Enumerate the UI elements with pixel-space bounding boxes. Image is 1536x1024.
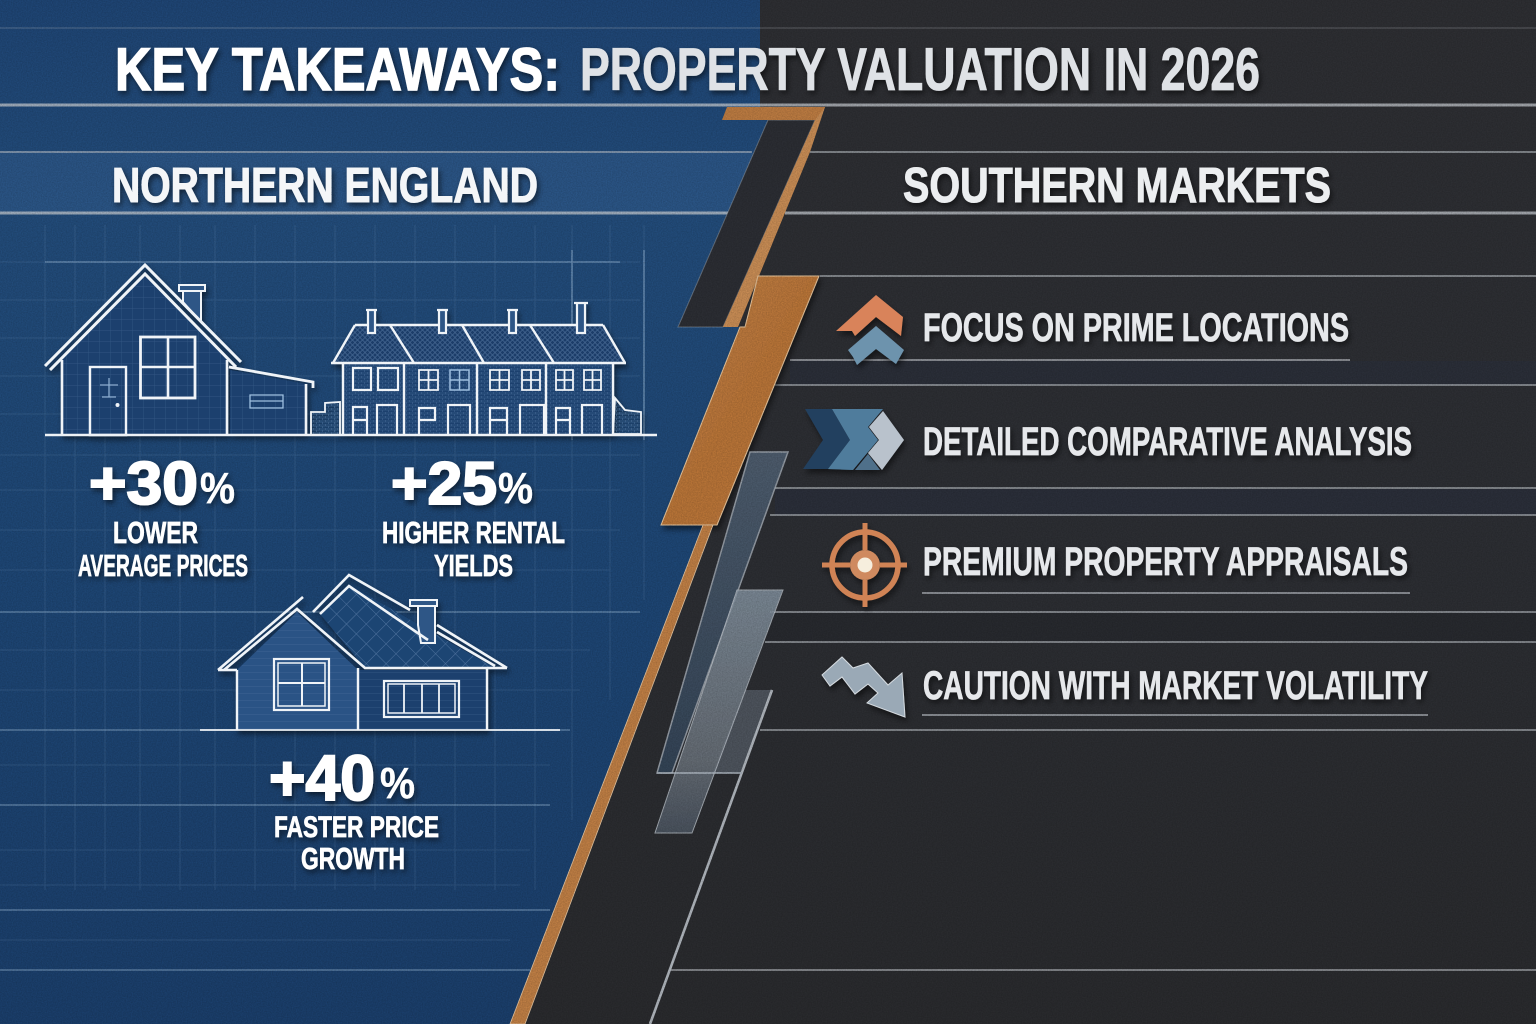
stat: +25% higher rental yields — [382, 450, 565, 583]
heading: Northern England: NORTHERN ENGLAND — [112, 159, 538, 213]
long silver rule — [650, 690, 772, 1024]
southern item: detailed comparative analysis — [803, 409, 1412, 470]
southern item: premium property appraisals — [822, 523, 1408, 607]
large copper block — [661, 276, 819, 525]
value +40: +40 — [269, 742, 375, 814]
icon: bungalow ground line — [200, 729, 560, 731]
label line 2: YIELDS — [434, 548, 513, 583]
title part: property valuation: PROPERTY VALUATION IN 2026 — [580, 36, 1260, 103]
icon: terraced houses — [311, 303, 641, 435]
icon: upward chevrons — [836, 295, 904, 365]
glass panel base line — [657, 772, 742, 774]
icon: right chevrons — [803, 409, 904, 470]
label line 1: HIGHER RENTAL — [382, 515, 565, 550]
value +30: +30 — [89, 450, 198, 517]
southern item: caution with market volatility — [822, 657, 1428, 717]
value +25: +25 — [391, 450, 497, 517]
thin copper strip — [723, 107, 825, 327]
icon: detached house with annex — [45, 265, 313, 435]
percent sign: % — [200, 464, 235, 513]
stat: +30% lower average prices — [78, 450, 248, 583]
southern item: focus on prime locations — [836, 295, 1349, 365]
title — [115, 36, 1260, 103]
diagonal copper strip — [510, 525, 713, 1024]
stat: +40% faster price growth — [269, 742, 439, 876]
blue glass panel — [657, 452, 788, 773]
icon: falling zigzag arrow — [822, 657, 905, 717]
light glass panel — [655, 590, 783, 833]
label: FOCUS ON PRIME LOCATIONS — [923, 306, 1349, 350]
percent sign: % — [498, 464, 533, 513]
icon: target crosshair — [822, 523, 907, 607]
heading: Southern Markets: SOUTHERN MARKETS — [903, 159, 1331, 213]
percent sign: % — [380, 759, 415, 808]
background: blueprint northern side — [0, 0, 800, 1024]
icon: ground line — [45, 434, 657, 436]
rear glass panel — [712, 690, 773, 773]
label line 2: AVERAGE PRICES — [78, 548, 248, 583]
label line 1: LOWER — [113, 515, 198, 550]
label line 1: FASTER PRICE — [274, 811, 439, 844]
dark zigzag panel — [678, 120, 815, 327]
title part: key takeaways: KEY TAKEAWAYS: — [115, 36, 560, 103]
chimneys — [366, 303, 588, 333]
copper top tab — [722, 107, 825, 120]
lightning divider: zigzag panels and copper strips — [510, 107, 825, 1024]
ground floor doors and windows — [353, 405, 602, 435]
label line 2: GROWTH — [301, 841, 405, 876]
right side band tints — [765, 361, 1536, 642]
icon: bungalow house — [218, 575, 507, 730]
upper windows — [353, 368, 398, 390]
